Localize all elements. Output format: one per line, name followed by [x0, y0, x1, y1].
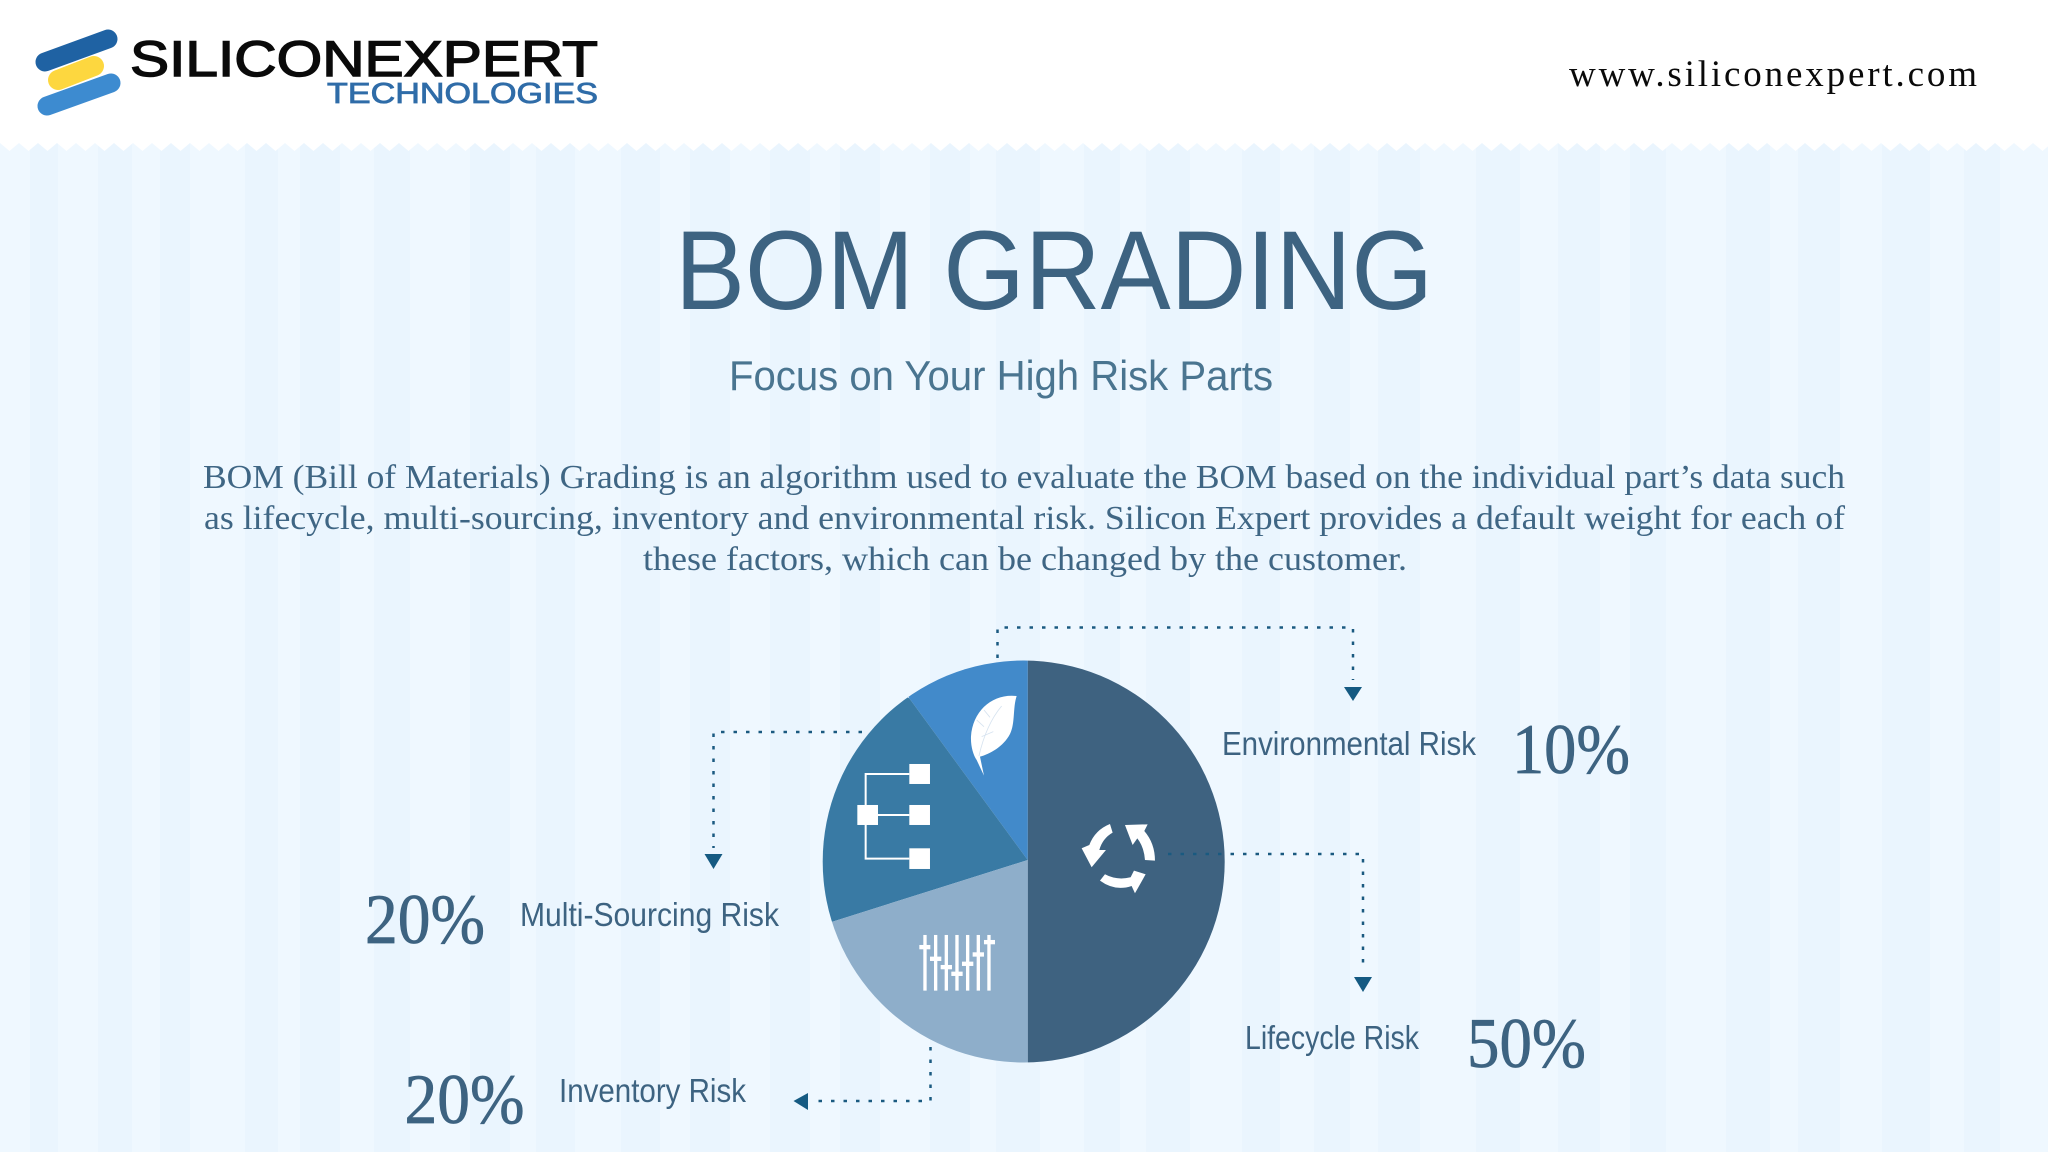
- logo tagline: TECHNOLOGIES: [327, 78, 598, 110]
- icon: recycle arrows: [1082, 824, 1155, 893]
- slice: inventory 20%: [832, 860, 1028, 1062]
- value: multi-sourcing 20%: 20%: [365, 881, 485, 959]
- value: lifecycle 50%: 50%: [1467, 1005, 1586, 1083]
- arrow: to lifecycle risk: [1168, 854, 1372, 992]
- label: inventory risk: Inventory Risk: [559, 1072, 746, 1109]
- value: inventory 20%: 20%: [404, 1061, 524, 1139]
- slice: multi-sourcing 20%: [822, 698, 1028, 922]
- value: environmental 10%: 10%: [1512, 711, 1630, 789]
- arrow: to environmental risk: [998, 628, 1362, 701]
- label: lifecycle risk: Lifecycle Risk: [1245, 1019, 1419, 1056]
- description text block: as lifecycle, multi-sourcing, inventory and environmental risk. Silicon Expert provides a default weight for each of: [204, 500, 1846, 537]
- description text block: BOM (Bill of Materials) Grading is an algorithm used to evaluate the BOM based on the individual part’s data such: [203, 459, 1845, 496]
- icon: leaf: [971, 696, 1017, 776]
- label: multi-sourcing risk: Multi-Sourcing Risk: [520, 896, 779, 933]
- icon: hierarchy: [857, 764, 930, 869]
- website url: www.siliconexpert.com: [1569, 54, 1977, 95]
- title: BOM GRADING: [675, 208, 1433, 333]
- label: environmental risk: Environmental Risk: [1222, 725, 1476, 762]
- description text block: these factors, which can be changed by the customer.: [643, 541, 1407, 578]
- arrow: to inventory risk: [794, 1047, 930, 1110]
- logo: SiliconExpert Technologies: [45, 31, 598, 110]
- logo wordmark: SILICONEXPERT: [130, 31, 598, 87]
- pie chart: [810, 650, 1238, 1070]
- icon: logo stripes: [45, 39, 111, 106]
- icon: sliders: [919, 935, 995, 991]
- slice: lifecycle 50%: [1028, 650, 1238, 1070]
- arrow: to multi-sourcing risk: [704, 732, 862, 869]
- subtitle: Focus on Your High Risk Parts: [729, 352, 1273, 399]
- description text block: [203, 459, 1846, 578]
- slice: environmental 10%: [908, 660, 1028, 860]
